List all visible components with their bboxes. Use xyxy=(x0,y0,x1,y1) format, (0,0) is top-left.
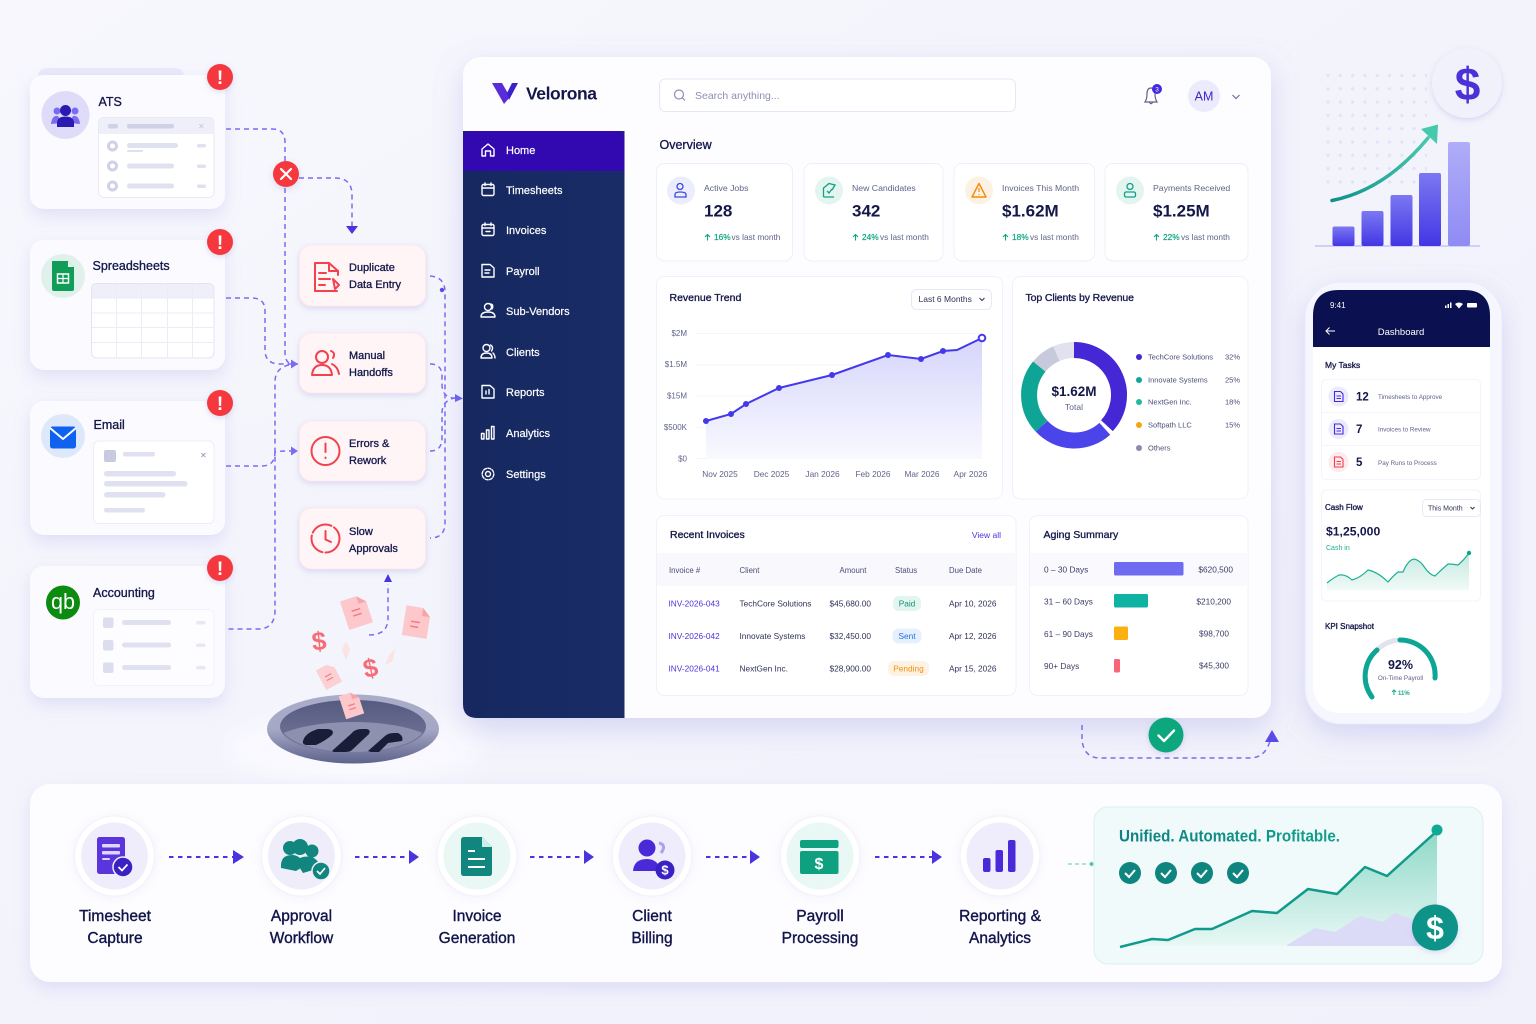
nav: Analytics: Analytics xyxy=(506,428,551,440)
table header xyxy=(657,553,1016,586)
link to outcome xyxy=(1068,862,1094,866)
aging rows: 90+ Days xyxy=(1044,661,1079,671)
icon: clock xyxy=(312,524,340,552)
nav: Sub-Vendors: Sub-Vendors xyxy=(506,306,570,318)
cash flow card: This Month xyxy=(1428,506,1463,512)
problem: Duplicate Data Entry xyxy=(300,245,426,306)
row: INV-2026-043: Apr 10, 2026 xyxy=(949,598,997,608)
sidebar xyxy=(463,83,624,718)
KPI: Active Jobs: Active Jobs xyxy=(704,183,749,193)
row: INV-2026-041: INV-2026-041 xyxy=(668,664,720,674)
KPI: Invoices This Month: Invoices This Month xyxy=(1002,183,1079,193)
cash flow card xyxy=(1322,490,1480,601)
step: Invoice Generation: Generation xyxy=(439,930,515,947)
row: INV-2026-043: INV-2026-043 xyxy=(668,598,720,608)
bars xyxy=(1315,142,1480,246)
dropdown xyxy=(912,290,992,310)
card: Email: Email xyxy=(94,418,125,432)
icon: qb logo: qb xyxy=(51,589,75,614)
search bar xyxy=(660,79,1016,112)
legend: TechCore Solutions xyxy=(1148,352,1213,362)
axis labels: $0 xyxy=(678,454,688,464)
nav: Invoices xyxy=(482,223,547,237)
problem: Slow Approvals: Slow xyxy=(349,526,373,538)
nav: Timesheets: Timesheets xyxy=(506,185,563,197)
dollar coin xyxy=(1412,904,1458,950)
avatar xyxy=(1188,80,1240,112)
card: Spreadsheets: Spreadsheets xyxy=(92,259,170,273)
aging rows: $45,300 xyxy=(1199,660,1229,670)
falling document 3 xyxy=(316,662,342,690)
KPI: Active Jobs xyxy=(656,164,792,261)
step: Approval Workflow: Approval xyxy=(271,908,332,925)
aging rows: 0 – 30 Days xyxy=(1044,564,1088,574)
task: pay runs xyxy=(1328,452,1437,472)
icon: payroll card: $ xyxy=(815,856,824,873)
search bar: Search anything... xyxy=(695,90,780,102)
KPI gauge: 92% xyxy=(1388,658,1413,672)
bottom panel: automated workflow xyxy=(30,784,1502,982)
x labels: Jan 2026 xyxy=(805,469,840,479)
aging rows: $620,500 xyxy=(1198,564,1233,574)
outcome panel: Unified. Automated. Profitable. xyxy=(1119,828,1340,846)
arrow 1 xyxy=(169,850,244,864)
icon: people xyxy=(42,91,90,139)
phone header: Dashboard xyxy=(1378,327,1424,338)
axis labels: $15M xyxy=(667,392,687,400)
KPI gauge: On-Time Payroll xyxy=(1378,675,1423,682)
KPI: Active Jobs: 16% xyxy=(714,232,731,242)
sparkline xyxy=(1327,551,1471,590)
mock list window: ✕ xyxy=(198,122,205,131)
row: INV-2026-042: INV-2026-042 xyxy=(668,631,720,641)
alert badge: Spreadsheets xyxy=(207,229,233,255)
row: INV-2026-041: $28,900.00 xyxy=(830,664,871,674)
panel: Revenue Trend xyxy=(656,276,1002,499)
alert badge: Email: ! xyxy=(217,394,223,415)
task: timesheets xyxy=(1328,386,1443,406)
problem: Slow Approvals: Approvals xyxy=(349,543,398,555)
nav: Sub-Vendors xyxy=(481,304,570,318)
card: ATS: ATS xyxy=(98,95,122,109)
KPI: Invoices This Month: 18% xyxy=(1012,232,1029,242)
icon: persons handoff xyxy=(312,351,339,375)
panel: Recent Invoices xyxy=(656,516,1016,696)
donut chart: $1.62M xyxy=(1051,384,1097,399)
row: INV-2026-043 xyxy=(668,596,997,611)
drain with leaking money and documents xyxy=(267,596,439,764)
icon: team approved xyxy=(281,839,330,880)
row: INV-2026-042: Apr 12, 2026 xyxy=(949,631,997,641)
mock accounting window xyxy=(94,610,214,686)
arrow 5 xyxy=(875,850,942,864)
drain xyxy=(267,694,439,764)
mock spreadsheet grid xyxy=(92,284,214,358)
KPI: New Candidates: vs last month xyxy=(880,232,929,242)
problem: Errors & Rework: Rework xyxy=(349,455,387,467)
mock list window xyxy=(98,118,214,198)
phone header: 9:41 xyxy=(1330,301,1346,310)
step: Timesheet Capture: Timesheet xyxy=(79,908,152,925)
panel: Recent Invoices: Recent Invoices xyxy=(670,529,745,541)
legend: Softpath LLC xyxy=(1148,420,1192,430)
nav: Home: Home xyxy=(506,145,535,157)
donut chart xyxy=(1029,350,1119,441)
nav: Invoices: Invoices xyxy=(506,225,547,237)
problem: Errors & Rework xyxy=(300,421,426,481)
icon: warning circle xyxy=(312,437,340,465)
legend: 25% xyxy=(1225,376,1240,384)
mock email window: ✕ xyxy=(200,451,207,460)
legend xyxy=(1136,352,1240,452)
aging rows: 31 – 60 Days xyxy=(1044,596,1093,606)
step: Payroll Processing: Processing xyxy=(782,930,858,947)
task: pay runs: 5 xyxy=(1356,457,1363,469)
step: Timesheet Capture xyxy=(74,816,154,947)
step: Timesheet Capture: Capture xyxy=(87,930,143,947)
task: invoices: Invoices to Review xyxy=(1378,426,1431,434)
step: Approval Workflow xyxy=(262,816,342,947)
table header: Status xyxy=(895,566,917,575)
icon: analytics bars xyxy=(983,840,1016,872)
KPI: New Candidates xyxy=(804,164,943,261)
line chart xyxy=(696,334,985,459)
step: Reporting & Analytics: Analytics xyxy=(969,930,1031,947)
panel: Recent Invoices: View all xyxy=(972,530,1001,540)
table header: Client xyxy=(740,566,760,575)
task: invoices xyxy=(1328,419,1431,439)
blocked badge xyxy=(273,161,299,187)
nav: Home xyxy=(482,144,535,157)
growth bar chart xyxy=(1315,48,1502,246)
icon: envelope xyxy=(41,414,85,458)
nav: Clients: Clients xyxy=(506,347,540,359)
KPI: Active Jobs: 128 xyxy=(704,202,732,220)
panel: Aging Summary: Aging Summary xyxy=(1044,529,1119,541)
icon: invoice xyxy=(461,837,492,876)
KPI: Invoices This Month xyxy=(954,164,1094,261)
step: Payroll Processing: Payroll xyxy=(796,908,844,925)
alert badge: ATS xyxy=(207,64,233,90)
axis labels: $2M xyxy=(671,329,687,338)
alert badge: ATS: ! xyxy=(217,68,223,89)
KPI: New Candidates: 24% xyxy=(862,232,879,242)
arrow 4 xyxy=(706,850,760,864)
problem: Errors & Rework: Errors & xyxy=(349,438,390,450)
step: Reporting & Analytics: Reporting & xyxy=(959,908,1042,925)
dollar coin: $ xyxy=(1455,58,1480,110)
logo xyxy=(492,83,597,104)
alert badge: Accounting xyxy=(207,555,233,581)
KPI: Payments Received: 22% xyxy=(1163,232,1180,242)
success path under dashboard xyxy=(1082,718,1279,758)
KPI: Payments Received: Payments Received xyxy=(1153,183,1230,193)
arrow 2 xyxy=(355,850,419,864)
axis labels: $1.5M xyxy=(665,360,687,369)
aging rows xyxy=(1030,553,1248,672)
task: timesheets: Timesheets to Approve xyxy=(1378,394,1443,401)
nav: Reports xyxy=(482,386,545,399)
mobile phone: My Tasks xyxy=(1325,360,1360,370)
notification bell: 3 xyxy=(1155,86,1159,94)
step: Reporting & Analytics xyxy=(959,816,1042,947)
table header: Amount xyxy=(840,566,867,575)
cash flow card: Cash Flow xyxy=(1325,503,1363,512)
problem: Slow Approvals xyxy=(300,508,426,569)
donut chart: Total xyxy=(1065,402,1083,412)
card: Accounting: Accounting xyxy=(93,586,155,600)
x labels: Nov 2025 xyxy=(702,469,738,479)
alert badge: Accounting: ! xyxy=(217,559,223,580)
task: invoices: 7 xyxy=(1356,424,1362,436)
KPI: Invoices This Month: vs last month xyxy=(1030,232,1079,242)
panel: Revenue Trend: Revenue Trend xyxy=(670,292,741,304)
mobile phone: KPI Snapshot xyxy=(1325,622,1375,631)
step: Payroll Processing xyxy=(780,816,860,947)
status icons xyxy=(1445,302,1477,308)
task list xyxy=(1322,380,1480,480)
problem: Duplicate Data Entry: Data Entry xyxy=(349,279,401,291)
step: Invoice Generation: Invoice xyxy=(452,908,502,925)
problem: Manual Handoffs: Handoffs xyxy=(349,367,393,379)
step: Client Billing: Client xyxy=(632,908,673,925)
nav: Payroll: Payroll xyxy=(506,266,540,278)
row: INV-2026-043: TechCore Solutions xyxy=(740,598,811,608)
KPI: New Candidates: 342 xyxy=(852,202,880,220)
mock email window xyxy=(94,441,214,524)
axis labels: $500K xyxy=(664,423,688,432)
card: Spreadsheets xyxy=(30,240,225,370)
aging rows: $210,200 xyxy=(1196,596,1231,606)
KPI: Active Jobs: vs last month xyxy=(732,232,781,242)
check marks xyxy=(1119,862,1249,884)
alert badge: Spreadsheets: ! xyxy=(217,233,223,254)
mobile phone xyxy=(1305,282,1502,724)
cash flow card: Cash in xyxy=(1326,545,1350,552)
cash flow card: $1,25,000 xyxy=(1326,524,1380,538)
step: Approval Workflow: Workflow xyxy=(270,930,334,947)
notification bell xyxy=(1145,84,1162,104)
row: INV-2026-043: $45,680.00 xyxy=(830,598,871,608)
step: Client Billing xyxy=(612,816,692,947)
panel: Top Clients by Revenue xyxy=(1012,276,1248,499)
KPI: Payments Received xyxy=(1105,164,1248,261)
aging rows: 61 – 90 Days xyxy=(1044,629,1093,639)
legend: 18% xyxy=(1225,398,1240,406)
dollar coin: $ xyxy=(1426,910,1444,946)
legend: Others xyxy=(1148,444,1171,452)
growth arrow xyxy=(1332,124,1438,200)
panel: Top Clients by Revenue: Top Clients by Revenue xyxy=(1026,292,1134,304)
card: ATS xyxy=(30,68,225,209)
KPI: Payments Received: $1.25M xyxy=(1153,202,1210,220)
row: INV-2026-042: $32,450.00 xyxy=(830,631,871,641)
icon: green sheet xyxy=(41,254,85,298)
nav: Reports: Reports xyxy=(506,387,545,399)
logo: Velorona xyxy=(526,84,597,104)
row: INV-2026-042 xyxy=(668,628,997,644)
row: INV-2026-041 xyxy=(668,661,997,676)
legend: 32% xyxy=(1225,352,1240,362)
arrow 3 xyxy=(530,850,594,864)
row: INV-2026-041: NextGen Inc. xyxy=(740,664,788,674)
falling document 4 xyxy=(339,690,364,719)
dashboard window xyxy=(463,57,1271,718)
icon: success check xyxy=(1148,718,1184,752)
profit chart xyxy=(1120,824,1442,947)
dollar coin xyxy=(1432,48,1502,118)
icon: timesheet xyxy=(97,837,133,877)
x labels: Mar 2026 xyxy=(904,469,940,479)
task: timesheets: 12 xyxy=(1356,392,1369,404)
x labels: Feb 2026 xyxy=(855,469,891,479)
phone header xyxy=(1313,290,1490,347)
x labels xyxy=(702,469,988,479)
dropdown: Last 6 Months xyxy=(918,294,972,304)
KPI: New Candidates: New Candidates xyxy=(852,183,916,193)
connector lines between source systems and problems xyxy=(226,129,463,635)
nav: Settings xyxy=(482,468,546,481)
table header: Invoice # xyxy=(669,566,701,575)
heading: Overview: Overview xyxy=(660,138,713,152)
problem: Manual Handoffs xyxy=(300,333,426,393)
dollar signs: $ xyxy=(310,625,328,657)
row: INV-2026-041: Apr 15, 2026 xyxy=(949,664,997,674)
icon: client dollar: $ xyxy=(661,862,669,878)
drain with leaking money and documents: $ xyxy=(360,652,381,684)
row: INV-2026-041: Pending xyxy=(893,664,924,674)
problem: Duplicate Data Entry: Duplicate xyxy=(349,262,395,274)
nav: Clients xyxy=(481,344,540,359)
nav: Settings: Settings xyxy=(506,469,546,481)
row: INV-2026-042: Sent xyxy=(898,631,916,641)
x labels: Dec 2025 xyxy=(754,469,790,479)
task: pay runs: Pay Runs to Process xyxy=(1378,460,1437,467)
aging rows: $98,700 xyxy=(1199,628,1229,638)
legend: 15% xyxy=(1225,420,1240,430)
KPI gauge xyxy=(1365,640,1435,697)
row: INV-2026-042: Innovate Systems xyxy=(740,631,805,641)
falling document 2 xyxy=(402,605,431,639)
outcome panel xyxy=(1094,807,1483,964)
panel: Aging Summary xyxy=(1030,516,1248,696)
legend: NextGen Inc. xyxy=(1148,398,1192,406)
card: Accounting xyxy=(30,566,225,698)
KPI: Payments Received: vs last month xyxy=(1181,232,1230,242)
alert badge: Email xyxy=(207,390,233,416)
nav: Payroll xyxy=(482,264,540,278)
axis labels xyxy=(664,329,688,464)
KPI gauge: 11% xyxy=(1398,691,1410,697)
icon: qb logo xyxy=(46,586,80,620)
KPI: Invoices This Month: $1.62M xyxy=(1002,202,1059,220)
step: Invoice Generation xyxy=(437,816,517,947)
row: INV-2026-043: Paid xyxy=(899,598,916,608)
card: Email xyxy=(30,401,225,535)
icon: document error xyxy=(315,263,339,291)
avatar: AM xyxy=(1195,90,1213,104)
x labels: Apr 2026 xyxy=(954,469,988,479)
table header: Due Date xyxy=(949,566,982,575)
step: Client Billing: Billing xyxy=(631,930,673,947)
nav: Timesheets xyxy=(482,183,563,197)
nav: Analytics xyxy=(482,426,551,440)
legend: Innovate Systems xyxy=(1148,376,1208,384)
falling document 1 xyxy=(340,594,373,630)
problem: Manual Handoffs: Manual xyxy=(349,350,385,362)
